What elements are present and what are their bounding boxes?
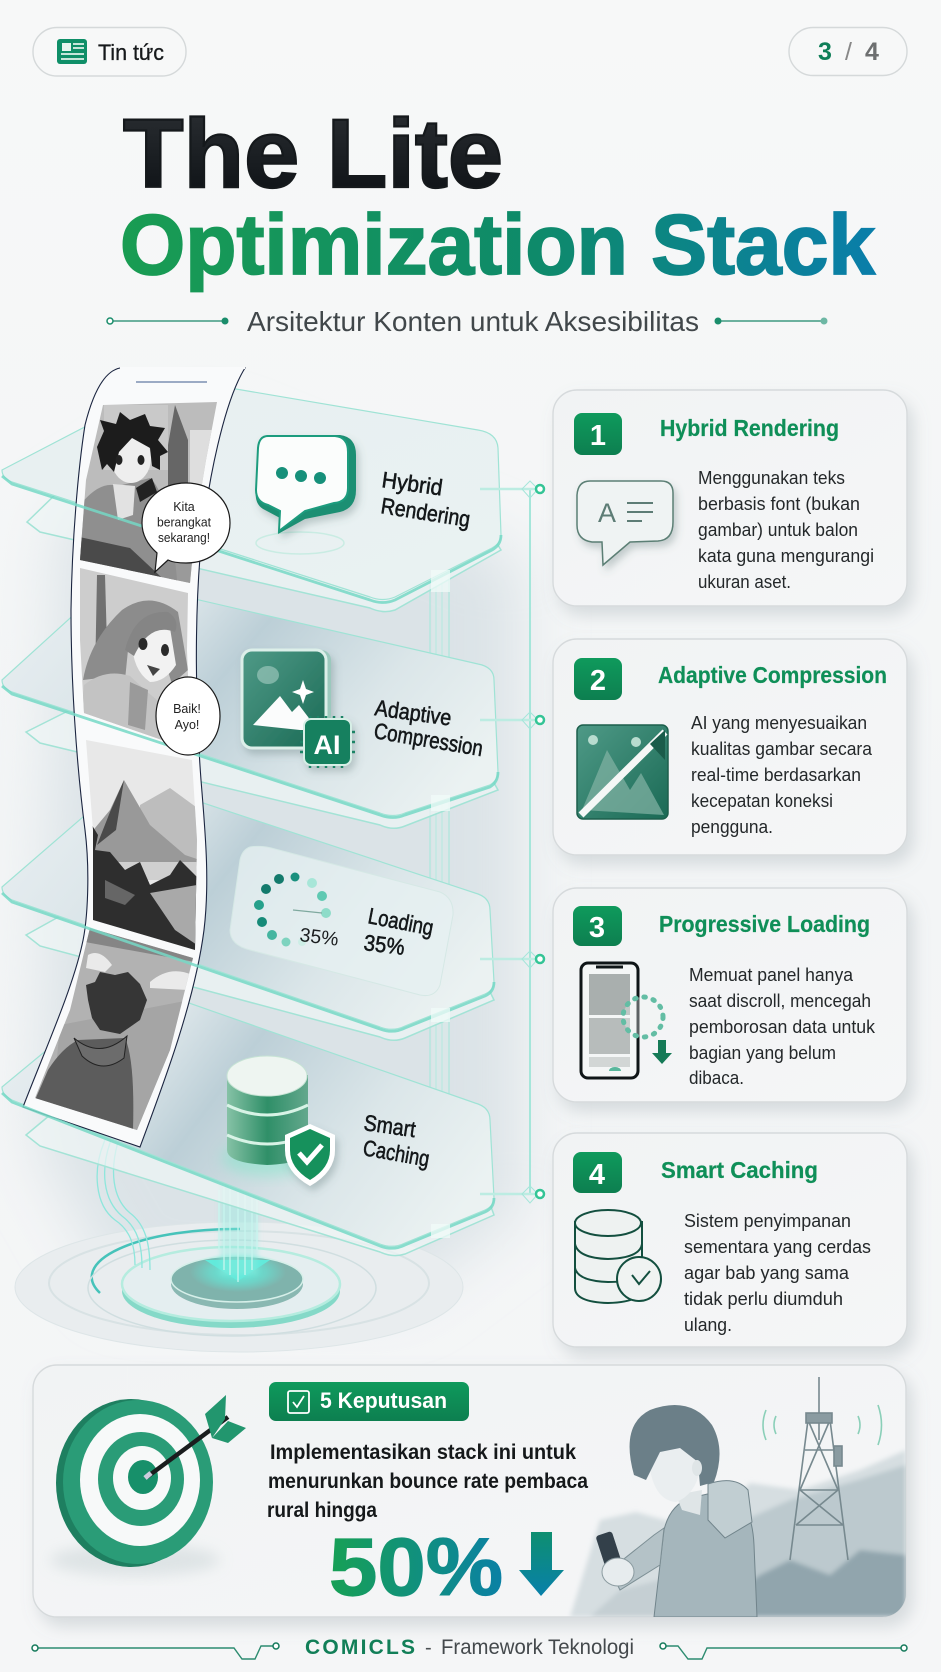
icon: phone scrolling: [581, 963, 672, 1078]
arrow: down: [519, 1532, 564, 1596]
speech bubble: Kita berangkat sekarang: [142, 483, 230, 572]
title: Optimization Stack: [120, 198, 876, 293]
shelf front edges: [2, 476, 501, 1248]
icon: database with shield: [222, 1056, 335, 1186]
card 1 body text: kata guna mengurangi: [698, 545, 874, 566]
decision text: rural hingga: [267, 1499, 377, 1522]
card 4 body text: sementara yang cerdas: [684, 1236, 871, 1257]
label: Smart Caching: Smart: [362, 1110, 418, 1142]
news tag pill: [33, 28, 186, 76]
panel: decision banner: [33, 1365, 906, 1617]
icon: chat bubble: [256, 435, 356, 554]
label: Loading 35%: [362, 903, 436, 960]
label: Adaptive Compression: [372, 695, 485, 761]
icon: database clock: [575, 1210, 661, 1303]
shelf 2: [2, 580, 498, 828]
loading glass card: 35%: [298, 924, 340, 951]
decision text: [267, 1441, 588, 1522]
icon: text bubble: [577, 481, 673, 565]
badge 2: [574, 658, 622, 700]
connector rail: [480, 481, 544, 1203]
card 1 body text: Menggunakan teks: [698, 467, 845, 488]
icon: text bubble: A: [598, 498, 616, 528]
data beams into base: [97, 1140, 258, 1282]
subtitle with decorative lines: Arsitektur Konten untuk Aksesibilitas: [247, 306, 699, 337]
panel: card 3 progressive loading: Progressive Loading: [659, 911, 870, 937]
footer: -: [425, 1637, 432, 1659]
decision text: Implementasikan stack ini untuk: [270, 1441, 576, 1464]
speech bubble: Kita berangkat sekarang: Kita: [173, 500, 195, 514]
panel: card 1 hybrid rendering: Hybrid Rendering: [660, 415, 839, 441]
label: Hybrid Rendering: [379, 467, 472, 532]
label: Smart Caching: [361, 1110, 431, 1172]
shelf 3: [2, 778, 494, 1040]
card 2 body text: pengguna.: [691, 816, 773, 837]
icon: loading dots ring: [254, 872, 331, 946]
speech bubble: Kita berangkat sekarang: berangkat: [157, 516, 211, 530]
icon: target with dart: [50, 1395, 246, 1576]
manga panel 1: [80, 402, 217, 583]
badge 2: 2: [590, 665, 606, 697]
icon: AI chip: AI: [314, 730, 340, 760]
card 1 body text: berbasis font (bukan: [698, 493, 860, 514]
panel: card 3 progressive loading: [553, 888, 907, 1102]
card 4 body text: tidak perlu diumduh: [684, 1288, 843, 1309]
label: Adaptive Compression: Compression: [372, 718, 485, 761]
label: Adaptive Compression: Adaptive: [373, 695, 453, 731]
badge 4: [573, 1152, 622, 1193]
label: Smart Caching: Caching: [361, 1135, 431, 1172]
card 1 body text: ukuran aset.: [698, 571, 791, 592]
badge 1: [574, 413, 622, 455]
shelf 1: [2, 379, 501, 612]
card 3 body text: [689, 964, 876, 1088]
card 4 body text: agar bab yang sama: [684, 1262, 850, 1283]
subtitle with decorative lines: [107, 306, 828, 337]
illustration: rural landscape and reader: [570, 1377, 906, 1617]
card 2 body text: kualitas gambar secara: [691, 738, 873, 759]
badge 3: 3: [589, 912, 605, 944]
manga panel 4: [35, 928, 193, 1130]
label: Hybrid Rendering: Hybrid: [380, 467, 444, 500]
page counter pill: [789, 28, 907, 76]
card 2 body text: real-time berdasarkan: [691, 764, 861, 785]
manga panel 3: [86, 740, 197, 950]
footer: Framework Teknologi: [441, 1636, 634, 1659]
icon: shield: [285, 1124, 335, 1186]
loading glass card: [230, 846, 453, 996]
page counter pill: /: [845, 38, 852, 66]
speech bubble: Baik Ayo: Baik!: [173, 702, 201, 716]
icon: split image: [577, 725, 668, 819]
base platform: [15, 1222, 463, 1352]
card 3 body text: pemborosan data untuk: [689, 1016, 876, 1037]
footer: COMICLS: [305, 1636, 415, 1659]
card 1 body text: gambar) untuk balon: [698, 519, 858, 540]
icon: cell tower: [763, 1377, 882, 1560]
panel: card 1 hybrid rendering: [553, 390, 907, 606]
page counter pill: 4: [865, 38, 879, 66]
decision text: menurunkan bounce rate pembaca: [268, 1470, 588, 1493]
badge: 5 Keputusan: [269, 1382, 469, 1421]
card 2 body text: kecepatan koneksi: [691, 790, 833, 811]
stat: 50 percent: 50%: [329, 1522, 503, 1613]
card 3 body text: dibaca.: [689, 1067, 744, 1088]
icon: AI image: [242, 650, 355, 768]
panel: card 4 smart caching: [553, 1133, 907, 1347]
card 1 body text: [698, 467, 874, 592]
card 2 body text: [691, 712, 873, 837]
card 4 body text: ulang.: [684, 1314, 732, 1335]
illustration: boy with phone: [595, 1405, 757, 1617]
vertical glass supports: [430, 570, 449, 1225]
news tag pill: Tin tức: [98, 40, 164, 65]
label: Loading 35%: Loading: [366, 903, 436, 941]
badge 1: 1: [590, 420, 606, 452]
panel: card 2 adaptive compression: Adaptive Compression: [658, 662, 887, 688]
badge: 5 Keputusan: 5 Keputusan: [320, 1388, 447, 1413]
speech bubble: Baik Ayo: Ayo!: [175, 718, 199, 732]
shelf 4: [2, 982, 494, 1256]
speech bubble: Kita berangkat sekarang: sekarang!: [158, 531, 210, 545]
card 3 body text: saat discroll, mencegah: [689, 990, 871, 1011]
speech bubble: Baik Ayo: [156, 677, 220, 755]
panel: card 2 adaptive compression: [553, 639, 907, 855]
card 4 body text: [684, 1210, 871, 1335]
icon: newspaper: [57, 39, 87, 64]
comic strip: [23, 368, 245, 1147]
title: The Lite: [123, 99, 503, 208]
badge 4: 4: [589, 1159, 605, 1191]
manga panel 2: [80, 568, 188, 740]
label: Loading 35%: 35%: [362, 930, 406, 960]
page counter pill: 3: [818, 38, 832, 66]
panel: card 4 smart caching: Smart Caching: [661, 1157, 818, 1183]
label: Hybrid Rendering: Rendering: [379, 493, 472, 532]
card 3 body text: Memuat panel hanya: [689, 964, 854, 985]
card 3 body text: bagian yang belum: [689, 1042, 836, 1063]
badge 3: [573, 906, 622, 946]
title: [120, 99, 876, 293]
card 2 body text: AI yang menyesuaikan: [691, 712, 867, 733]
card 4 body text: Sistem penyimpanan: [684, 1210, 851, 1231]
footer: [32, 1636, 907, 1659]
